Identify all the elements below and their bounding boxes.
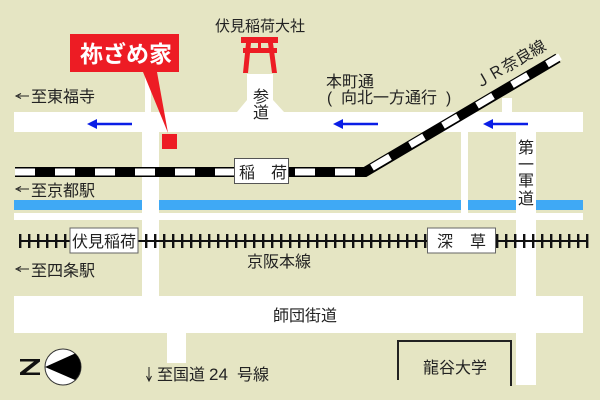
label: Daiichi Gundo — [518, 139, 534, 208]
label: Honmachi street: ) — [446, 90, 451, 107]
station: Inari: 稲 — [239, 164, 255, 182]
label: Honmachi street — [326, 73, 451, 107]
label: sando: 参 — [253, 88, 269, 106]
label: to Route 24: 24 — [209, 365, 228, 384]
station: Fukakusa — [428, 228, 496, 253]
station: Fushimi-Inari: 伏見稲荷 — [72, 233, 136, 251]
label: sando: 道 — [253, 104, 269, 122]
arrow: to Shijo station — [16, 266, 29, 272]
label: Daiichi Gundo: 道 — [518, 190, 534, 208]
Ryukoku University building — [398, 341, 511, 386]
label: to Shijo station: 至四条駅 — [31, 262, 95, 280]
label: to Higashi-Fukuchi: 至東福寺 — [31, 88, 95, 106]
road network — [14, 72, 583, 385]
callout: shop name: 祢ざめ家 — [80, 41, 172, 67]
label: Daiichi Gundo: 一 — [518, 157, 534, 174]
arrow: to Kyoto station — [16, 186, 29, 192]
arrow: to Higashi-Fukuchi — [16, 94, 29, 98]
icon: north compass — [20, 349, 81, 385]
Keihan main line track — [19, 240, 589, 242]
label: Fushimi Inari Taisha: 伏見稲荷大社 — [215, 18, 305, 35]
station: Inari: 荷 — [271, 164, 287, 182]
station: Fukakusa: 草 — [470, 233, 486, 251]
label: Honmachi street: 本町通 — [326, 73, 374, 91]
label: to Route 24: 至国道 — [157, 367, 205, 384]
label: Honmachi street: 向北一方通行 — [341, 89, 437, 107]
icon: torii gate — [241, 37, 278, 73]
label: Honmachi street: ( — [327, 90, 333, 107]
blue arrow 3 — [483, 119, 528, 129]
arrow: to Route 24 — [146, 367, 152, 381]
station: Fushimi-Inari — [70, 228, 138, 253]
label: sando — [253, 88, 269, 122]
label: Daiichi Gundo: 軍 — [518, 173, 534, 190]
blue arrow 2 — [333, 119, 378, 129]
station: Inari — [234, 158, 288, 184]
Ryukoku University building: 龍谷大学 — [423, 359, 487, 377]
marker: shop location — [162, 134, 177, 149]
label: Keihan main line: 京阪本線 — [247, 253, 311, 271]
label: to Route 24: 号線 — [237, 366, 269, 384]
station: Fukakusa: 深 — [437, 233, 453, 251]
label: Daiichi Gundo: 第 — [518, 139, 534, 157]
label: Shidan Kaido: 師団街道 — [273, 307, 337, 325]
river — [14, 200, 583, 210]
callout: shop name — [70, 34, 179, 133]
blue arrow 1 — [87, 119, 132, 129]
label: JR Nara line: ＪＲ奈良線 — [471, 37, 549, 92]
label: to Kyoto station: 至京都駅 — [31, 182, 95, 200]
JR Nara line track — [15, 56, 560, 172]
